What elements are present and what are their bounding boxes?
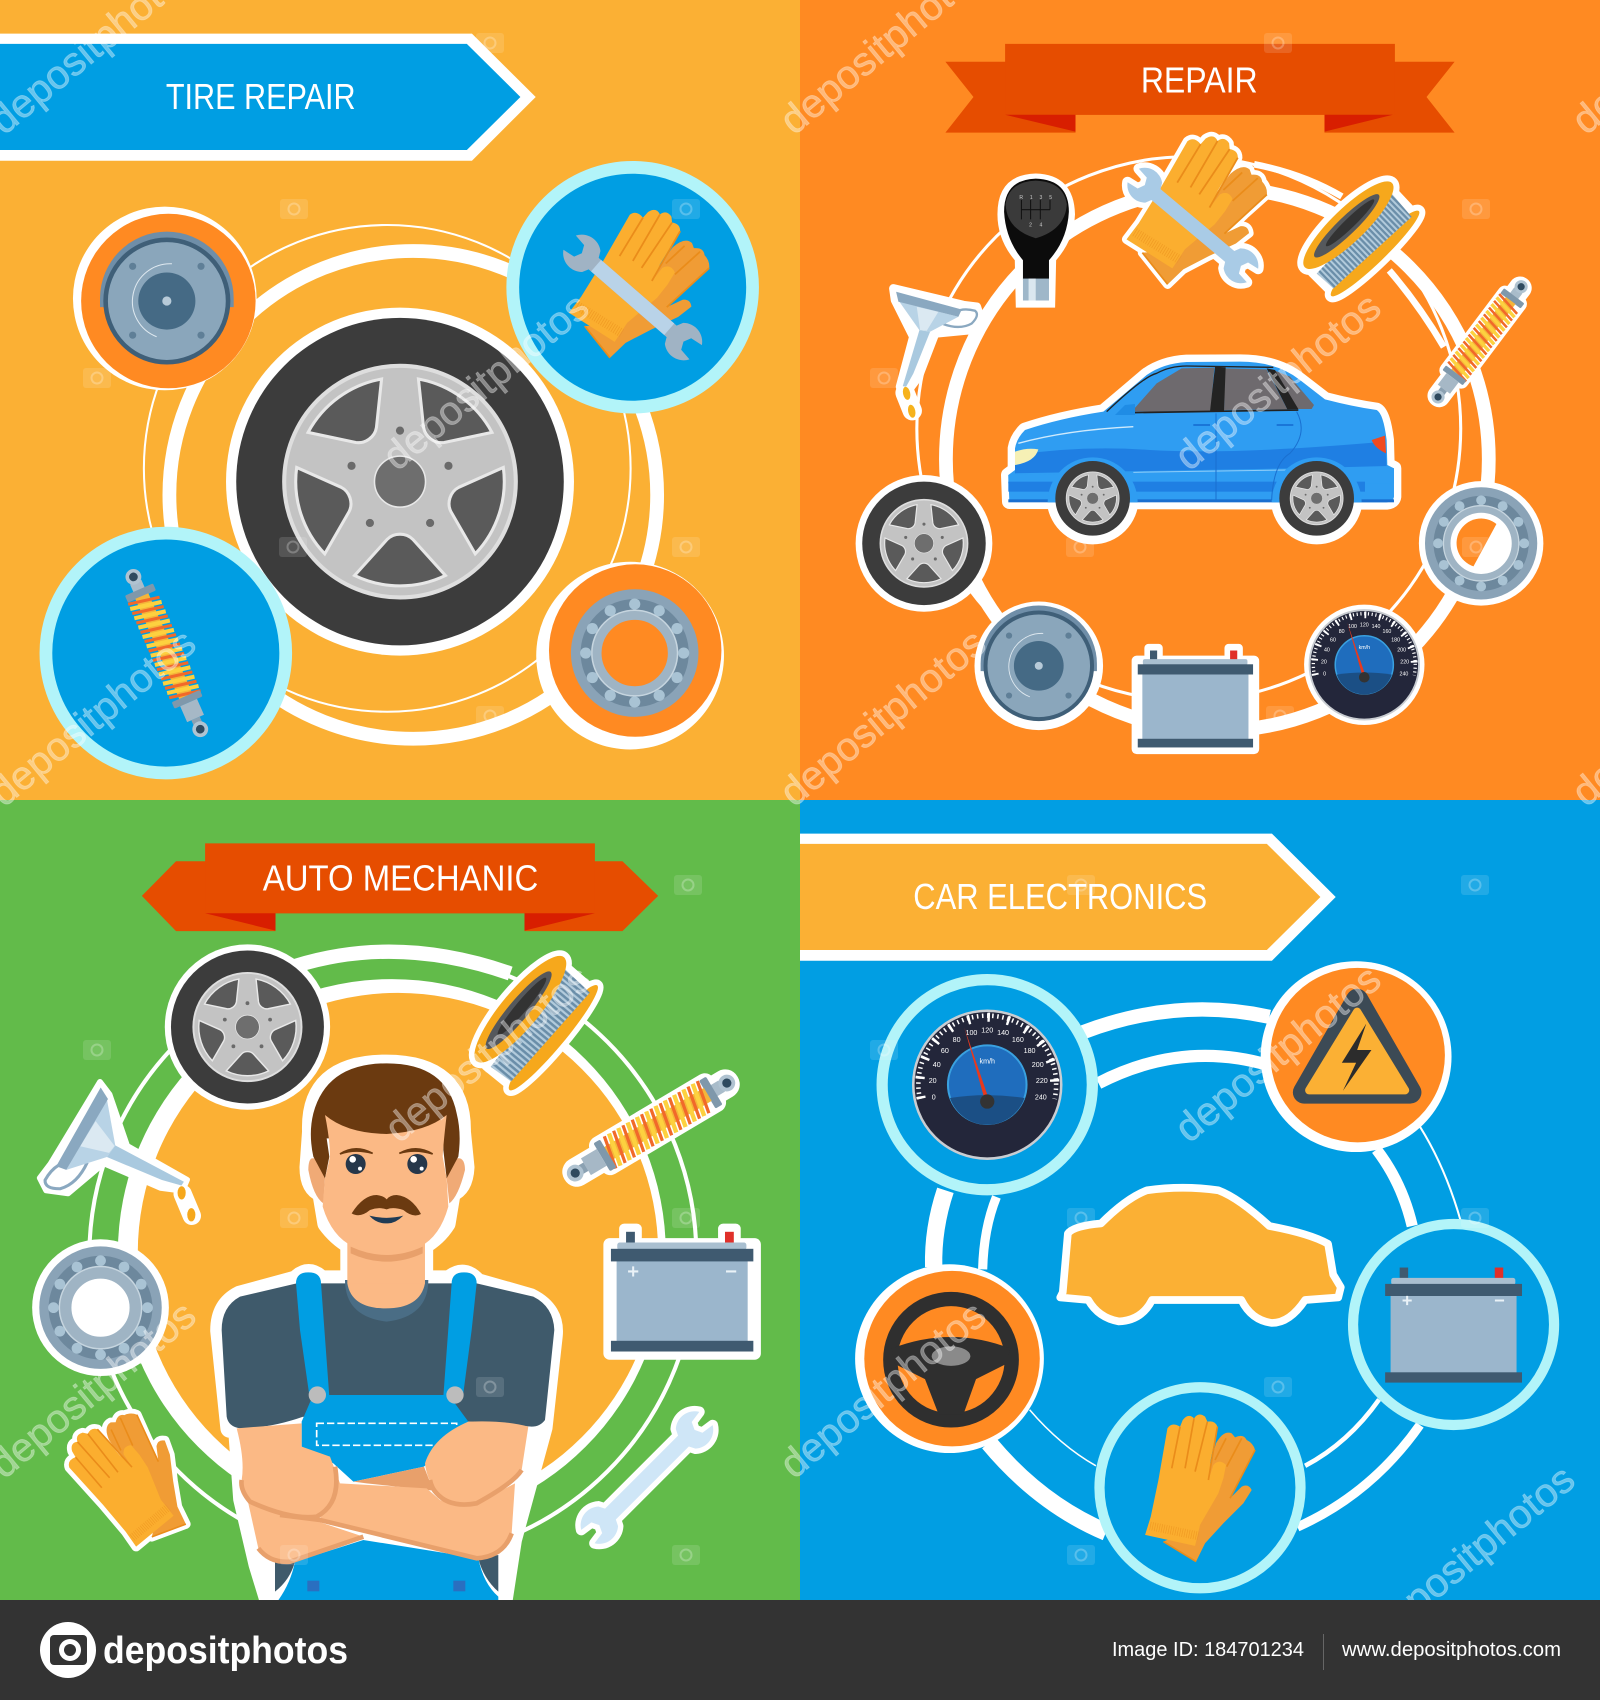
ribbon: repair: REPAIR xyxy=(1141,60,1258,100)
icon: shock absorber xyxy=(1419,269,1540,415)
icon: bearing xyxy=(32,1239,169,1376)
banner: tire repair: TIRE REPAIR xyxy=(166,77,356,117)
icon: brake disc xyxy=(974,602,1103,730)
icon: gloves and wrench xyxy=(1117,119,1280,306)
watermark: camera stamps xyxy=(83,33,1490,1565)
connecting rings xyxy=(144,225,657,739)
icon: gear shift knob xyxy=(997,173,1075,308)
icon: brake disc xyxy=(73,207,257,390)
illustration: mechanic xyxy=(219,1063,554,1607)
rings and yellow disc xyxy=(89,952,696,1560)
icon: battery xyxy=(1353,1224,1554,1425)
icon: shock absorber xyxy=(46,533,286,773)
icon: bearing xyxy=(536,562,724,749)
ribbon: auto mechanic: AUTO MECHANIC xyxy=(263,858,538,898)
watermark: depositphotos text: depositphotos xyxy=(1361,1457,1583,1651)
watermark: depositphotos text: depositphotos xyxy=(1167,285,1389,479)
icon: steering wheel xyxy=(855,1264,1044,1453)
icon: speedometer xyxy=(882,980,1092,1190)
watermark: depositphotos text: depositphotos xyxy=(772,1293,994,1487)
icon: gear shift knob: 2 4 xyxy=(1029,223,1043,229)
banner: tire repair xyxy=(0,34,536,161)
icon: depositphotos logo mark xyxy=(40,1622,96,1678)
panel: repair xyxy=(800,0,1600,800)
icon: funnel xyxy=(19,1082,196,1259)
banner: car electronics: CAR ELECTRONICS xyxy=(913,877,1207,917)
connecting rings xyxy=(917,157,1489,731)
icon: gloves xyxy=(46,1394,220,1562)
icon: wheel xyxy=(165,944,330,1110)
ribbon: repair xyxy=(945,44,1455,133)
panel: tire repair xyxy=(0,0,800,800)
illustration: blue car xyxy=(1008,362,1394,544)
icon: shock absorber xyxy=(554,1059,748,1198)
watermark: depositphotos text: depositphotos xyxy=(772,621,994,815)
icon: gloves xyxy=(1099,1387,1301,1588)
central wheel xyxy=(226,308,574,656)
icon: air filter xyxy=(453,940,615,1102)
watermark: depositphotos text: depositphotos xyxy=(1167,957,1389,1151)
watermark: depositphotos text: depositphotos xyxy=(375,285,597,479)
icon: high voltage warning xyxy=(1261,961,1452,1152)
icon: bearing xyxy=(1419,481,1543,606)
icon: gear shift knob: R 1 3 5 xyxy=(1019,195,1052,201)
banner: car electronics xyxy=(800,834,1336,961)
ribbon: auto mechanic xyxy=(142,843,658,931)
icon: air filter xyxy=(1293,171,1425,303)
icon: gloves and wrench xyxy=(513,167,753,407)
icon: wrench xyxy=(575,1405,719,1550)
footer website: www.depositphotos.com xyxy=(1341,1639,1561,1661)
illustration: car silhouette xyxy=(1060,1188,1341,1323)
icon: battery xyxy=(1132,644,1259,754)
connecting rings xyxy=(934,1009,1461,1532)
panel: auto mechanic xyxy=(0,800,800,1600)
icon: speedometer xyxy=(1304,605,1424,725)
icon: battery xyxy=(603,1224,761,1360)
watermark: depositphotos text: depositphotos xyxy=(377,957,599,1151)
footer bar xyxy=(0,1600,1600,1700)
panel: car electronics xyxy=(800,800,1600,1600)
mechanic head xyxy=(308,1063,465,1283)
icon: wheel xyxy=(856,475,992,612)
footer brand name: depositphotos xyxy=(103,1630,348,1672)
footer image id: Image ID: 184701234 xyxy=(1112,1639,1304,1661)
mechanic torso and arms xyxy=(222,1237,554,1607)
icon: funnel xyxy=(893,288,980,418)
